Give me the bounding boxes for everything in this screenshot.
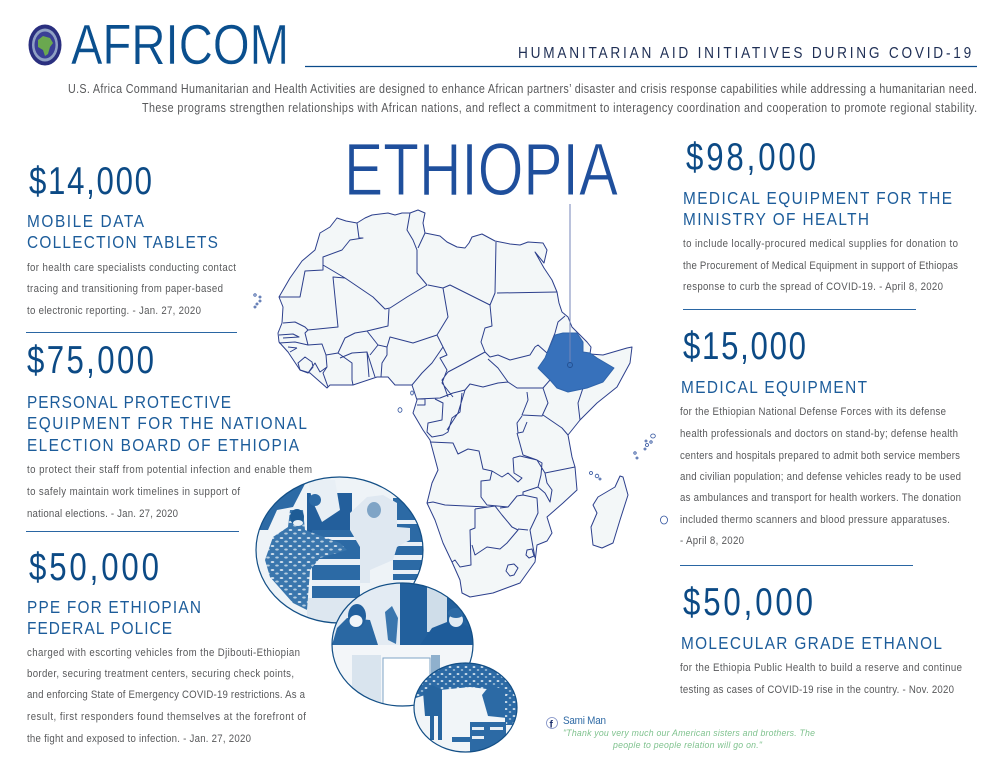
panel: $50,000 molecular grade ethanol: testing as cases of COVID-19 rise in the country. - Nov. 2020 <box>680 683 954 696</box>
photo: soldiers on steps <box>255 476 424 624</box>
panel: $75,000 PPE for election board: ELECTION BOARD OF ETHIOPIA <box>27 436 299 455</box>
panel: $14,000 tablets: to electronic reporting. - Jan. 27, 2020 <box>27 304 201 317</box>
pin line to Ethiopia <box>568 204 572 368</box>
intro text: These programs strengthen relationships with African nations, and reflect a commitment to interagency coordination and cooperation to promote regional stability. <box>142 101 977 115</box>
panel: $50,000 federal police: the fight and exposed to infection. - Jan. 27, 2020 <box>27 732 251 745</box>
panel: $15,000 medical equipment: MEDICAL EQUIPMENT <box>681 378 867 397</box>
panel: $75,000 PPE for election board: PERSONAL PROTECTIVE <box>27 393 231 412</box>
panel: $14,000 tablets <box>26 160 237 332</box>
panel: $15,000 medical equipment: and civilian population; and defense vehicles ready to be used <box>680 470 961 483</box>
panel: $98,000 ministry of health: MINISTRY OF HEALTH <box>683 210 869 229</box>
subtitle: HUMANITARIAN AID INITIATIVES DURING COVID-19 <box>518 45 971 62</box>
panel: $50,000 federal police <box>27 546 306 745</box>
panel: $98,000 ministry of health: MEDICAL EQUIPMENT FOR THE <box>683 189 952 208</box>
panel: $98,000 ministry of health: response to curb the spread of COVID-19. - April 8, 2020 <box>683 280 943 293</box>
panel: $14,000 tablets: COLLECTION TABLETS <box>27 233 218 252</box>
intro text: U.S. Africa Command Humanitarian and Health Activities are designed to enhance African partners’ disaster and crisis response capabilities while addressing a humanitarian need. <box>68 82 977 96</box>
panel: $75,000 PPE for election board: EQUIPMENT FOR THE NATIONAL <box>27 414 307 433</box>
icon: facebook <box>546 718 558 730</box>
panel: $50,000 molecular grade ethanol <box>680 581 962 696</box>
panel: $75,000 PPE for election board: national elections. - Jan. 27, 2020 <box>27 507 178 520</box>
panel: $50,000 federal police: FEDERAL POLICE <box>27 619 172 638</box>
panel: $15,000 medical equipment: $15,000 <box>683 325 806 368</box>
heading: ETHIOPIA: ETHIOPIA <box>344 128 618 211</box>
panel: $75,000 PPE for election board: $75,000 <box>27 339 154 382</box>
quote: Sami Man <box>546 716 815 750</box>
Ethiopia highlighted <box>538 333 614 392</box>
icon: facebook: f <box>550 720 554 730</box>
panel: $15,000 medical equipment: health professionals and doctors on stand-by; defense health <box>680 427 958 440</box>
quote: Sami Man: Sami Man <box>563 716 606 727</box>
panel: $98,000 ministry of health: $98,000 <box>686 136 816 179</box>
panel: $15,000 medical equipment: centers and hospitals prepared to admit both service members <box>680 449 960 462</box>
lesotho and swaziland <box>506 549 534 576</box>
panel: $50,000 federal police: charged with escorting vehicles from the Djibouti-Ethiopian <box>27 646 300 659</box>
panel: $15,000 medical equipment <box>680 325 961 566</box>
panel: $75,000 PPE for election board: to protect their staff from potential infection and enable them <box>27 463 312 476</box>
panel: $98,000 ministry of health: the Procurement of Medical Equipment in support of Ethiopas <box>683 259 958 272</box>
panel: $15,000 medical equipment: for the Ethiopian National Defense Forces with its defense <box>680 405 946 418</box>
panel: $15,000 medical equipment: included thermo scanners and blood pressure apparatuses. <box>680 513 950 526</box>
panel: $98,000 ministry of health: to include locally-procured medical supplies for donation to <box>683 237 958 250</box>
islands <box>254 294 668 524</box>
panel: $15,000 medical equipment: as ambulances and transport for health workers. The donation <box>680 491 961 504</box>
photo: two officials at a table <box>330 580 480 710</box>
panel: $50,000 federal police: $50,000 <box>29 546 159 589</box>
panel: $15,000 medical equipment: - April 8, 2020 <box>680 534 744 547</box>
panel: $75,000 PPE for election board: to safely maintain work timelines in support of <box>27 485 240 498</box>
country borders <box>279 213 583 567</box>
quote: Sami Man: "Thank you very much our American sisters and brothers. The <box>563 728 815 738</box>
intro text <box>68 82 977 115</box>
title: AFRICOM: AFRICOM <box>71 13 289 77</box>
panel: $50,000 federal police: and enforcing State of Emergency COVID-19 restrictions. As a <box>27 688 305 701</box>
photo: responders outdoors <box>413 662 518 753</box>
madagascar <box>591 476 628 548</box>
panel: $14,000 tablets: MOBILE DATA <box>27 212 144 231</box>
panel: $75,000 PPE for election board <box>26 339 312 532</box>
panel: $14,000 tablets: $14,000 <box>29 160 152 203</box>
icon: AFRICOM emblem <box>28 24 62 66</box>
panel: $98,000 ministry of health <box>683 136 958 310</box>
map of Africa <box>254 204 668 597</box>
panel: $14,000 tablets: for health care specialists conducting contact <box>27 261 236 274</box>
panel: $50,000 molecular grade ethanol: $50,000 <box>683 581 813 624</box>
panel: $50,000 federal police: PPE FOR ETHIOPIAN <box>27 598 201 617</box>
panel: $14,000 tablets: tracing and transitioning from paper-based <box>27 282 223 295</box>
continent outline <box>278 210 632 597</box>
quote: Sami Man: people to people relation will go on." <box>612 740 763 750</box>
panel: $50,000 federal police: border, securing treatment centers, securing check points, <box>27 667 294 680</box>
panel: $50,000 federal police: result, first responders found themselves at the forefront of <box>27 710 306 723</box>
panel: $50,000 molecular grade ethanol: MOLECULAR GRADE ETHANOL <box>681 634 942 653</box>
panel: $50,000 molecular grade ethanol: for the Ethiopia Public Health to build a reserve and continue <box>680 661 962 674</box>
